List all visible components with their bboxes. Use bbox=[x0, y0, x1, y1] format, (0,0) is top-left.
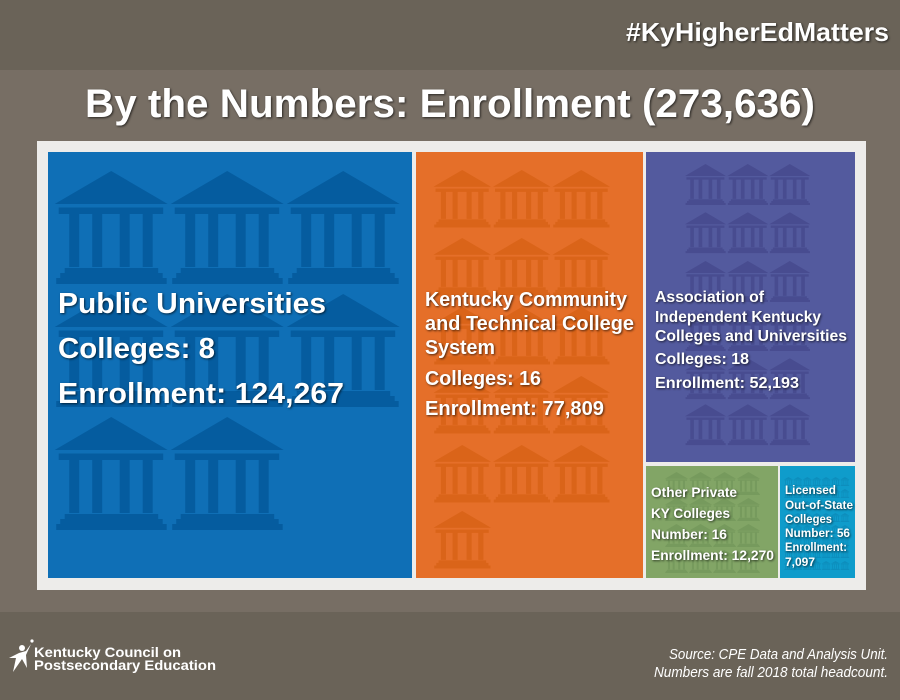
panel: licensed out-of-state colleges: 7,097 bbox=[785, 555, 815, 569]
panel: independent colleges bbox=[646, 152, 855, 462]
header band bbox=[0, 0, 900, 70]
treemap panel bbox=[37, 141, 866, 590]
source note: Source: CPE Data and Analysis Unit. bbox=[669, 647, 888, 663]
panel: KCTCS bbox=[416, 152, 643, 578]
panel: independent colleges: Enrollment: 52,193 bbox=[655, 375, 799, 392]
logo: Kentucky Council on Postsecondary Education: Kentucky Council on bbox=[34, 644, 181, 660]
panel: licensed out-of-state colleges: Colleges bbox=[785, 512, 832, 526]
panel: licensed out-of-state colleges bbox=[780, 466, 855, 578]
panel: KCTCS: Colleges: 16 bbox=[425, 368, 541, 390]
panel: public universities: Enrollment: 124,267 bbox=[58, 378, 344, 410]
panel: other private colleges bbox=[646, 466, 778, 578]
panel: other private colleges: Other Private bbox=[651, 484, 737, 500]
panel: KCTCS: System bbox=[425, 337, 495, 359]
panel: independent colleges: Colleges and Universities bbox=[655, 328, 847, 345]
logo: Kentucky Council on Postsecondary Education bbox=[9, 639, 216, 673]
panel: public universities: Colleges: 8 bbox=[58, 333, 215, 365]
panel: KCTCS: and Technical College bbox=[425, 313, 634, 335]
panel: KCTCS: Kentucky Community bbox=[425, 289, 628, 311]
panel: KCTCS: Enrollment: 77,809 bbox=[425, 398, 604, 420]
hashtag: #KyHigherEdMatters bbox=[626, 17, 889, 47]
panel: independent colleges: Independent Kentucky bbox=[655, 309, 821, 326]
title: By the Numbers: Enrollment (273,636) bbox=[85, 82, 815, 126]
panel: public universities: Public Universities bbox=[58, 288, 326, 320]
panel: independent colleges: Association of bbox=[655, 289, 765, 306]
footer band bbox=[0, 612, 900, 700]
panel: licensed out-of-state colleges: Number: 56 bbox=[785, 526, 850, 540]
panel: public universities bbox=[48, 152, 412, 578]
logo: Kentucky Council on Postsecondary Education: Postsecondary Education bbox=[34, 657, 216, 673]
panel: other private colleges: Number: 16 bbox=[651, 526, 727, 542]
panel: licensed out-of-state colleges: Licensed bbox=[785, 483, 836, 497]
panel: licensed out-of-state colleges: Out-of-State bbox=[785, 498, 853, 512]
source note: Numbers are fall 2018 total headcount. bbox=[654, 665, 888, 681]
panel: independent colleges: Colleges: 18 bbox=[655, 351, 749, 368]
panel: other private colleges: Enrollment: 12,270 bbox=[651, 547, 774, 563]
source note bbox=[654, 647, 888, 681]
panel: licensed out-of-state colleges: Enrollment: bbox=[785, 540, 847, 554]
panel: other private colleges: KY Colleges bbox=[651, 505, 730, 521]
icon: reaching figure bbox=[9, 639, 34, 672]
